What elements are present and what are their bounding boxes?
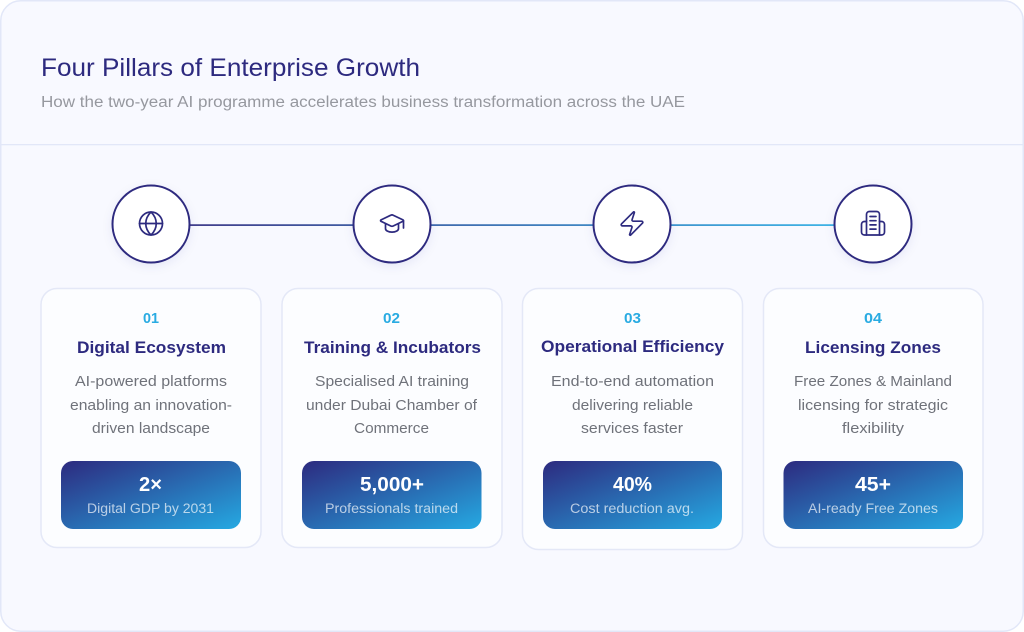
title: Four Pillars of Enterprise Growth (41, 54, 420, 82)
subtitle: How the two-year AI programme accelerates business transformation across the UAE (41, 94, 685, 111)
icon: globe (112, 186, 190, 262)
heading: Training & Incubators (304, 338, 481, 357)
description: AI-powered platforms (75, 373, 227, 390)
connector line (188, 224, 836, 226)
icon: lightning bolt (594, 186, 670, 262)
description: End-to-end automation (551, 373, 714, 390)
panel: card 2 (282, 288, 502, 548)
stat box: 2× (139, 474, 162, 496)
description (306, 373, 478, 437)
description: under Dubai Chamber of (306, 397, 478, 414)
stat box: Cost reduction avg. (570, 501, 694, 516)
description: Free Zones & Mainland (794, 373, 952, 390)
description: licensing for strategic (798, 397, 949, 414)
description: Specialised AI training (315, 373, 469, 390)
stat box: AI-ready Free Zones (808, 501, 938, 516)
description: flexibility (842, 420, 905, 437)
description (70, 373, 232, 437)
stat box (543, 461, 722, 529)
stat box (61, 461, 241, 529)
stat box: 45+ (855, 474, 891, 496)
stat box (302, 461, 482, 529)
description: enabling an innovation- (70, 397, 232, 414)
panel: card 1 (41, 288, 261, 548)
number 03: 03 (624, 311, 641, 327)
description (551, 373, 714, 437)
icon: graduation cap (354, 186, 430, 262)
stat box: 5,000+ (360, 474, 424, 496)
header (41, 54, 685, 111)
description: delivering reliable (572, 397, 693, 414)
stat box (784, 461, 963, 529)
number 04: 04 (864, 311, 882, 327)
description: services faster (581, 420, 683, 437)
description: driven landscape (92, 420, 210, 437)
stat box: 40% (613, 474, 652, 496)
panel: card 3 (522, 288, 742, 550)
icon: building (834, 186, 912, 262)
description: Commerce (354, 420, 429, 437)
panel: card 4 (764, 288, 983, 548)
heading: Licensing Zones (805, 338, 941, 357)
number 02: 02 (383, 311, 400, 327)
stat box: Digital GDP by 2031 (87, 501, 214, 516)
heading: Operational Efficiency (541, 337, 725, 356)
heading: Digital Ecosystem (77, 338, 226, 357)
number 01: 01 (143, 311, 159, 327)
description (794, 373, 952, 437)
stat box: Professionals trained (325, 501, 458, 516)
